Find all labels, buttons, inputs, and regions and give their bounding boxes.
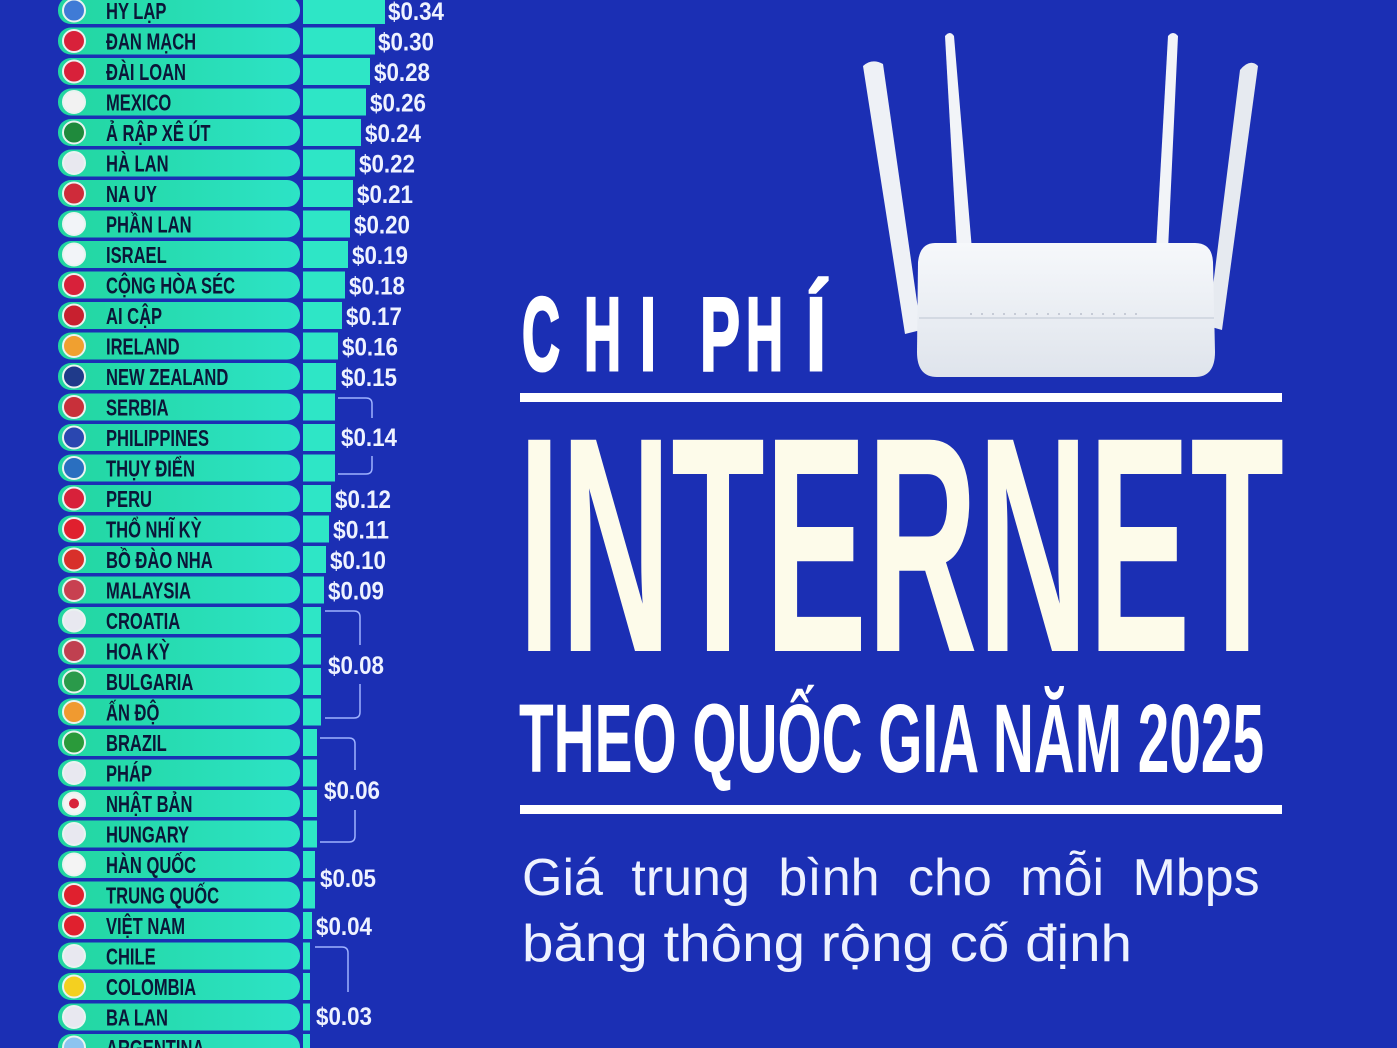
row: Philippines: PHILIPPINES — [106, 426, 209, 452]
row: Ấn Độ — [58, 698, 321, 726]
heading: CHI PHÍ: I — [640, 277, 656, 393]
router image — [863, 33, 1258, 377]
row: Mexico: MEXICO — [106, 91, 171, 116]
row: Nhật Bản — [58, 790, 317, 818]
heading: CHI PHÍ: H — [584, 277, 621, 393]
group label: $0.08 — [325, 611, 384, 718]
row: Thụy Điển — [58, 454, 335, 482]
antenna left outer — [863, 61, 921, 334]
row: Israel: ISRAEL — [106, 243, 167, 269]
antenna left inner — [945, 33, 972, 250]
row: Cộng hòa Séc: $0.18 — [349, 272, 405, 300]
group label: $0.05: $0.05 — [320, 865, 376, 893]
row: Mexico: $0.26 — [370, 90, 426, 118]
row: New Zealand: NEW ZEALAND — [106, 365, 228, 391]
row: Mexico — [58, 88, 426, 118]
row: Peru: PERU — [106, 487, 152, 513]
row: Hoa Kỳ: HOA KỲ — [106, 638, 170, 665]
row: Colombia — [58, 973, 310, 1001]
row: Chile: CHILE — [106, 945, 156, 970]
group label: $0.14 — [338, 398, 397, 474]
row: Pháp: PHÁP — [106, 761, 152, 787]
row: Ba Lan — [58, 1004, 310, 1031]
heading: CHI PHÍ — [522, 277, 828, 393]
heading: CHI PHÍ: Í — [806, 277, 828, 393]
row: Đan Mạch — [58, 28, 434, 56]
row: Thổ Nhĩ Kỳ: $0.11 — [333, 516, 389, 544]
row: Hungary: HUNGARY — [106, 823, 190, 848]
row: New Zealand: $0.15 — [341, 364, 397, 392]
row: Hà Lan: $0.22 — [359, 150, 415, 178]
row: Hy Lạp: HY LẠP — [106, 0, 166, 25]
row: Philippines — [58, 424, 335, 452]
row: Đài Loan: $0.28 — [374, 59, 430, 87]
row: Đan Mạch: ĐAN MẠCH — [106, 30, 196, 55]
row: New Zealand — [58, 363, 397, 392]
row: Nhật Bản: NHẬT BẢN — [106, 790, 192, 818]
row: Pháp — [58, 760, 317, 787]
row: Na Uy — [58, 180, 413, 209]
row: Croatia: CROATIA — [106, 609, 180, 635]
subtitle: băng thông rộng cố định — [522, 915, 1132, 973]
row: Bồ Đào Nha — [58, 546, 386, 575]
row: Brazil: BRAZIL — [106, 731, 167, 757]
row: Malaysia — [58, 576, 384, 606]
row: Hy Lạp — [58, 0, 444, 26]
row: Na Uy: $0.21 — [357, 181, 413, 209]
row: Peru — [58, 485, 391, 514]
group label: $0.08: $0.08 — [328, 652, 384, 680]
row: Hà Lan — [58, 150, 415, 178]
heading: CHI PHÍ: H — [746, 277, 783, 393]
group label: $0.14: $0.14 — [341, 424, 397, 452]
row: Trung Quốc: TRUNG QUỐC — [106, 882, 219, 909]
row: Đài Loan — [58, 58, 430, 87]
row: Ireland — [58, 332, 398, 362]
row: Trung Quốc — [58, 882, 315, 909]
row: Serbia — [58, 394, 335, 421]
divider bottom — [520, 805, 1282, 814]
row: Bulgaria: BULGARIA — [106, 670, 193, 696]
row: Peru: $0.12 — [335, 486, 391, 514]
group label: $0.06: $0.06 — [324, 777, 380, 805]
row: Ireland: $0.16 — [342, 334, 398, 362]
divider top — [520, 393, 1282, 402]
row: Cộng hòa Séc — [58, 272, 405, 300]
row: Ả Rập Xê Út: Ả RẬP XÊ ÚT — [106, 119, 211, 147]
row: Việt Nam: $0.04 — [316, 913, 372, 941]
row: Ả Rập Xê Út — [58, 119, 421, 148]
row: Bồ Đào Nha: $0.10 — [330, 547, 386, 575]
row: Ả Rập Xê Út: $0.24 — [365, 120, 421, 148]
row: Bồ Đào Nha: BỒ ĐÀO NHA — [106, 546, 213, 574]
row: Israel — [58, 241, 408, 270]
row: Thụy Điển: THỤY ĐIỂN — [106, 456, 195, 482]
row: Serbia: SERBIA — [106, 396, 169, 421]
row: Hàn Quốc: HÀN QUỐC — [106, 851, 196, 879]
row: Đài Loan: ĐÀI LOAN — [106, 59, 186, 86]
row: Argentina — [58, 1034, 310, 1048]
row: Bulgaria — [58, 668, 321, 696]
row: Ai Cập: AI CẬP — [106, 302, 162, 330]
row: Brazil — [58, 729, 317, 757]
row: Thổ Nhĩ Kỳ — [58, 516, 389, 544]
row: Colombia: COLOMBIA — [106, 975, 196, 1001]
row: Ấn Độ: ẤN ĐỘ — [106, 699, 159, 726]
row: Hoa Kỳ — [58, 638, 321, 665]
heading: CHI PHÍ: P — [700, 277, 740, 393]
row: Phần Lan: PHẦN LAN — [106, 212, 192, 238]
row: Việt Nam — [58, 912, 372, 941]
heading: CHI PHÍ: C — [522, 277, 560, 393]
row: Croatia — [58, 607, 321, 635]
row: Na Uy: NA UY — [106, 182, 157, 208]
antenna right outer — [1208, 63, 1258, 330]
row: Phần Lan — [58, 210, 410, 240]
row: Ai Cập — [58, 302, 402, 331]
chart: internet cost per country — [58, 0, 444, 1048]
antenna right inner — [1156, 33, 1178, 250]
row: Hungary — [58, 820, 317, 848]
row: Israel: $0.19 — [352, 242, 408, 270]
row: Việt Nam: VIỆT NAM — [106, 912, 185, 940]
row: Malaysia: MALAYSIA — [106, 579, 191, 604]
row: Thổ Nhĩ Kỳ: THỔ NHĨ KỲ — [106, 516, 202, 543]
row: Chile — [58, 942, 310, 970]
subtitle — [522, 849, 1260, 973]
row: Ai Cập: $0.17 — [346, 303, 402, 331]
row: Malaysia: $0.09 — [328, 578, 384, 606]
row: Hàn Quốc — [58, 851, 315, 879]
group label: $0.03: $0.03 — [316, 1003, 372, 1031]
subtitle: Giá trung bình cho mỗi Mbps — [522, 849, 1260, 907]
row: Phần Lan: $0.20 — [354, 212, 410, 240]
group label: $0.03 — [315, 947, 372, 1031]
group label: $0.06 — [320, 738, 380, 842]
row: Cộng hòa Séc: CỘNG HÒA SÉC — [106, 272, 235, 299]
row: Ireland: IRELAND — [106, 335, 180, 360]
row: Hà Lan: HÀ LAN — [106, 151, 169, 177]
router body — [917, 243, 1215, 377]
row: Đan Mạch: $0.30 — [378, 28, 434, 56]
row: Ba Lan: BA LAN — [106, 1006, 168, 1031]
